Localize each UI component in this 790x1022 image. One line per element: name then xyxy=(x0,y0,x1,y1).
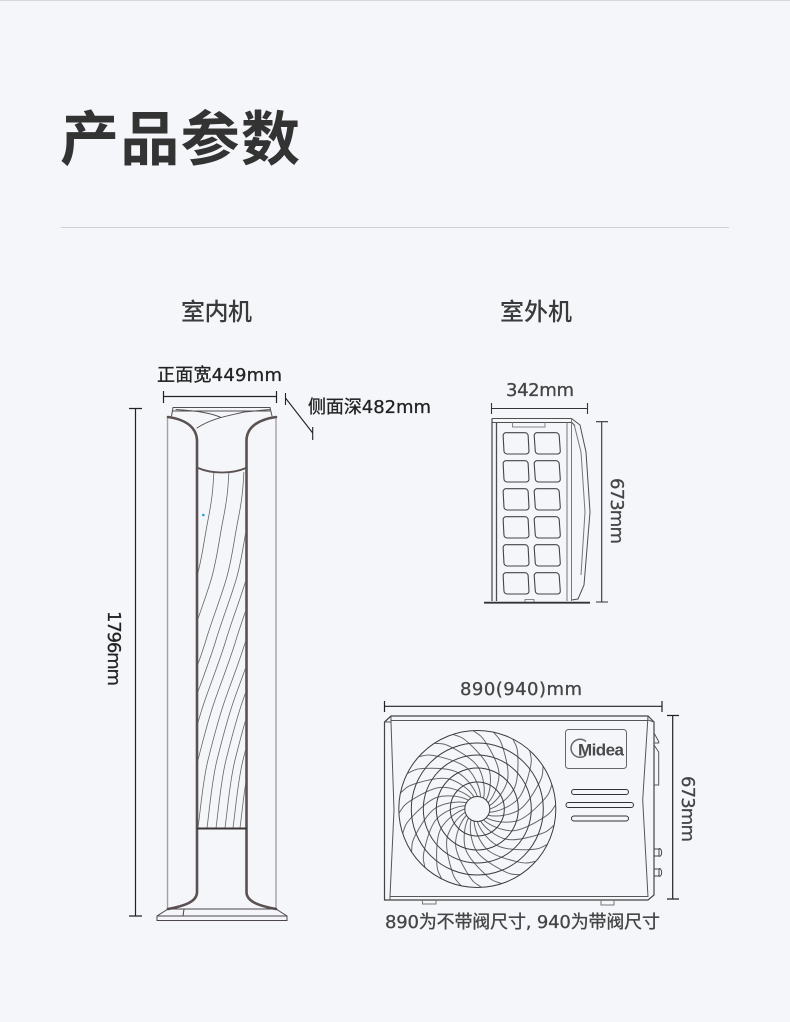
dimension: side view width xyxy=(492,380,588,414)
top cap xyxy=(172,408,272,428)
dimension: outdoor front width xyxy=(384,679,662,712)
logo badge xyxy=(566,730,626,768)
dimension: indoor height xyxy=(103,408,142,916)
dimension: indoor front width: 正面宽449mm xyxy=(157,365,282,386)
dimension: side view width: 342mm xyxy=(506,380,574,401)
valve bracket xyxy=(654,733,659,785)
heading: outdoor unit: 室外机 xyxy=(500,292,572,327)
side view grille xyxy=(503,433,560,594)
outdoor unit side view xyxy=(484,418,590,603)
wave panel lines xyxy=(198,472,246,828)
logo badge: Midea xyxy=(578,740,625,760)
wave panel top arc xyxy=(198,468,246,472)
fan blades xyxy=(396,728,558,890)
casing xyxy=(384,716,654,900)
dimension: side view height: 673mm xyxy=(606,478,627,544)
left wing edge xyxy=(168,417,197,909)
dimension: outdoor height: 673mm xyxy=(677,776,698,842)
dimension: outdoor height xyxy=(667,716,698,899)
outer side panels xyxy=(168,418,276,908)
dimension: side view height xyxy=(596,422,627,602)
right wing edge xyxy=(246,417,276,909)
feet xyxy=(422,900,614,905)
vent slots xyxy=(566,790,634,821)
fan guard xyxy=(396,728,558,890)
dimension: indoor side depth: 侧面深482mm xyxy=(308,397,431,418)
base xyxy=(157,909,287,920)
valves xyxy=(654,848,662,876)
heading: indoor unit: 室内机 xyxy=(181,292,252,327)
indoor unit drawing xyxy=(156,407,288,921)
wave panel bottom bar xyxy=(198,828,246,830)
fan rings xyxy=(399,730,556,888)
dimension: indoor front width xyxy=(157,365,282,403)
outdoor unit front view xyxy=(384,716,662,905)
note: valve dimensions: 890为不带阀尺寸, 940为带阀尺寸 xyxy=(385,912,660,933)
status light xyxy=(202,514,205,516)
title: 产品参数 xyxy=(60,92,300,177)
dimension: indoor height: 1796mm xyxy=(103,611,124,686)
dimension: indoor side depth xyxy=(286,393,431,440)
dimension: outdoor front width: 890(940)mm xyxy=(460,679,582,700)
